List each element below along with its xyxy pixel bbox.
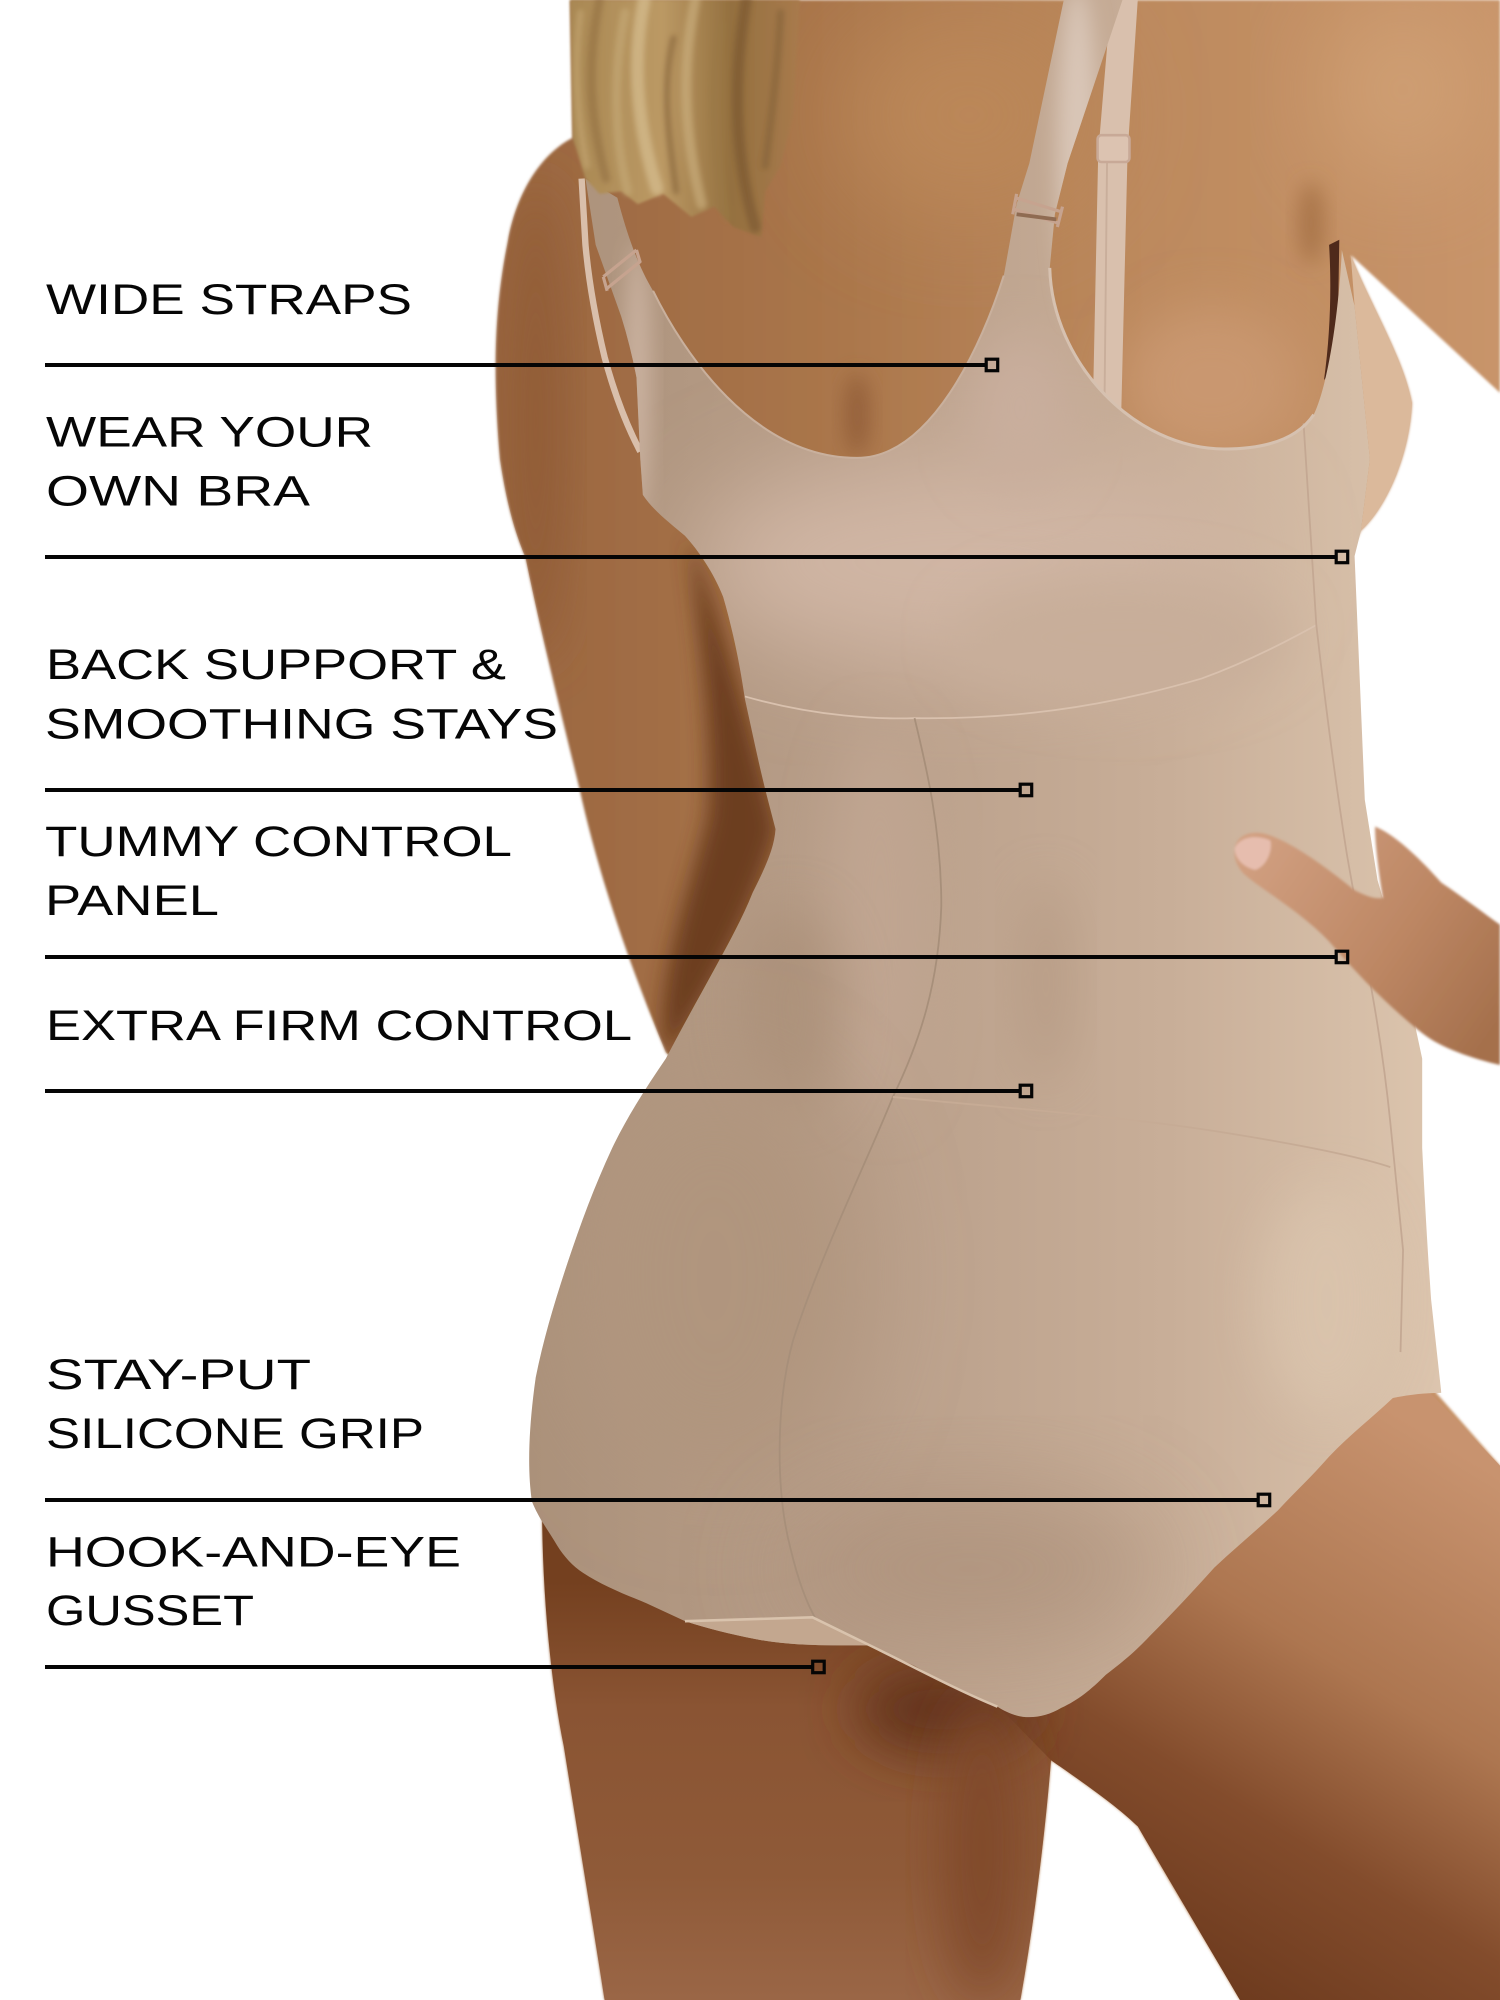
- label line two: OWN BRA: [46, 468, 310, 516]
- leader line: [45, 1089, 1020, 1093]
- strap adjuster, right: [1013, 194, 1062, 227]
- marker: [1336, 951, 1348, 963]
- label line two: GUSSET: [46, 1587, 254, 1635]
- label line two: SILICONE GRIP: [46, 1410, 424, 1458]
- callout: wide straps: [45, 276, 998, 371]
- label: STAY-PUT: [46, 1351, 311, 1399]
- callout: back support and smoothing stays: [45, 641, 1032, 796]
- skin shading: [510, 0, 1500, 2000]
- leader line: [45, 1665, 813, 1669]
- own-bra strap, left: [582, 179, 640, 452]
- marker: [986, 359, 998, 371]
- callout: tummy control panel: [45, 818, 1348, 963]
- strap adjuster, left: [603, 250, 640, 291]
- label: WIDE STRAPS: [46, 276, 412, 324]
- marker: [1020, 784, 1032, 796]
- thumbnail: [1235, 837, 1271, 870]
- callout: hook-and-eye gusset: [45, 1528, 824, 1673]
- label: HOOK-AND-EYE: [46, 1528, 461, 1576]
- marker: [1020, 1085, 1032, 1097]
- marker: [1336, 551, 1348, 563]
- label: BACK SUPPORT &: [46, 641, 506, 689]
- marker: [813, 1661, 824, 1673]
- label: WEAR YOUR: [46, 408, 373, 456]
- callout: extra firm control: [45, 1002, 1032, 1097]
- bust side panel: [1351, 255, 1412, 531]
- leader line: [45, 1498, 1258, 1502]
- leader line: [45, 788, 1020, 792]
- garment seams: [653, 268, 1403, 1707]
- leader line: [45, 363, 987, 367]
- label: TUMMY CONTROL: [45, 818, 512, 866]
- body skin silhouette: [496, 0, 1500, 2000]
- label line two: PANEL: [45, 877, 219, 925]
- callout: stay-put silicone grip: [45, 1351, 1270, 1506]
- hand on hip: [1234, 827, 1500, 1065]
- leader line: [45, 955, 1336, 959]
- figure: model wearing shapewear bodysuit, rear view: [496, 0, 1500, 2000]
- armpit shadow: [1324, 240, 1339, 380]
- bodysuit garment: [529, 0, 1442, 1718]
- marker: [1258, 1494, 1270, 1506]
- label: EXTRA FIRM CONTROL: [46, 1002, 632, 1050]
- label line two: SMOOTHING STAYS: [45, 700, 558, 748]
- own-bra strap, right: [1093, 0, 1138, 416]
- hair: [570, 0, 800, 237]
- leader line: [45, 555, 1336, 559]
- callout: wear your own bra: [45, 408, 1348, 563]
